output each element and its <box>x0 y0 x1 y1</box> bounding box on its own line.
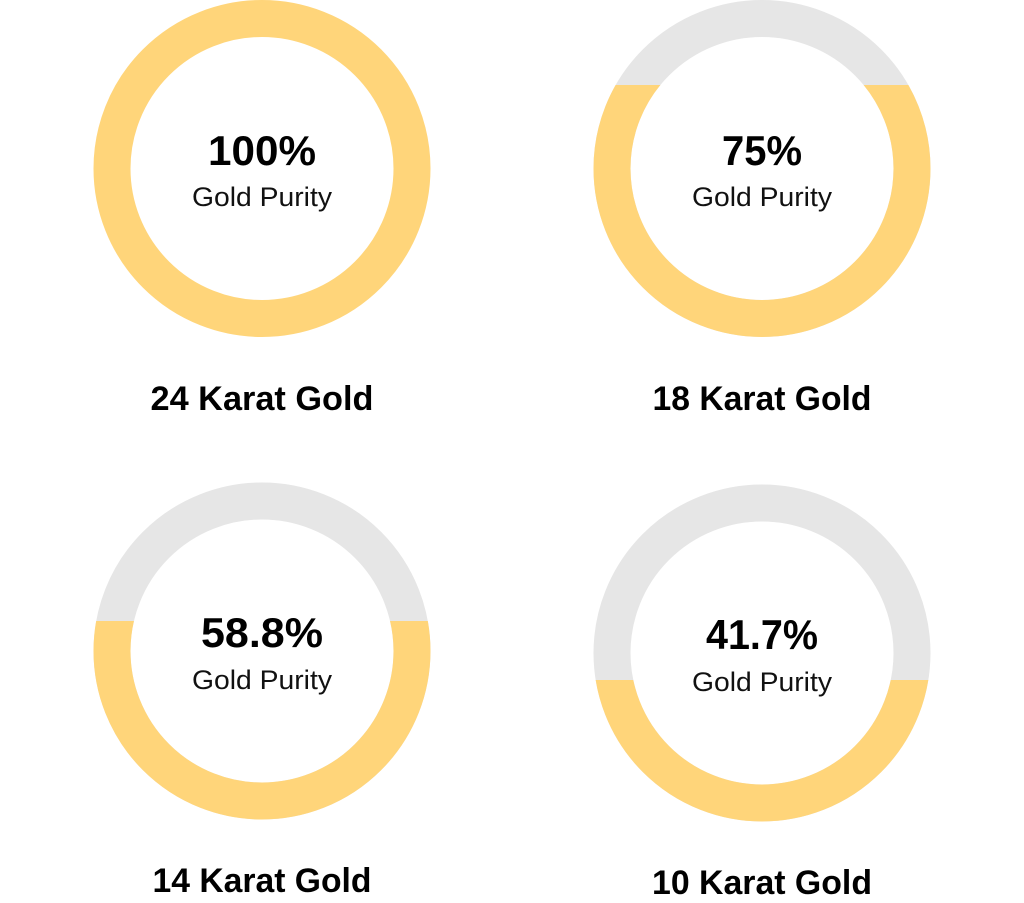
panel: 14 karat gold <box>112 501 412 900</box>
value: 58.8% gold purity <box>192 609 333 695</box>
label: 18 karat gold: 18 Karat Gold <box>652 380 872 418</box>
value: 41.7% gold purity <box>692 611 833 697</box>
panel: 10 karat gold <box>612 503 912 902</box>
donut chart: 100% <box>112 18 412 318</box>
label: 24 karat gold: 24 Karat Gold <box>150 380 374 418</box>
donut chart: 41.7% <box>612 503 912 803</box>
value: 75% gold purity: Gold Purity <box>692 182 833 212</box>
value: 100% gold purity <box>192 127 333 212</box>
donut chart: 58.8% <box>112 501 412 801</box>
value: 58.8% gold purity: 58.8% <box>201 609 323 656</box>
label: 14 karat gold: 14 Karat Gold <box>152 862 372 900</box>
value: 41.7% gold purity: Gold Purity <box>692 667 833 697</box>
label: 10 karat gold: 10 Karat Gold <box>652 864 872 902</box>
value: 75% gold purity <box>692 127 833 212</box>
value: 41.7% gold purity: 41.7% <box>706 611 818 658</box>
panel: 24 karat gold <box>112 18 412 418</box>
panel: 18 karat gold <box>612 18 912 418</box>
value: 58.8% gold purity: Gold Purity <box>192 665 333 695</box>
value: 75% gold purity: 75% <box>722 127 802 174</box>
value: 100% gold purity: 100% <box>208 127 316 174</box>
value: 100% gold purity: Gold Purity <box>192 182 333 212</box>
donut chart: 75% <box>612 18 912 318</box>
